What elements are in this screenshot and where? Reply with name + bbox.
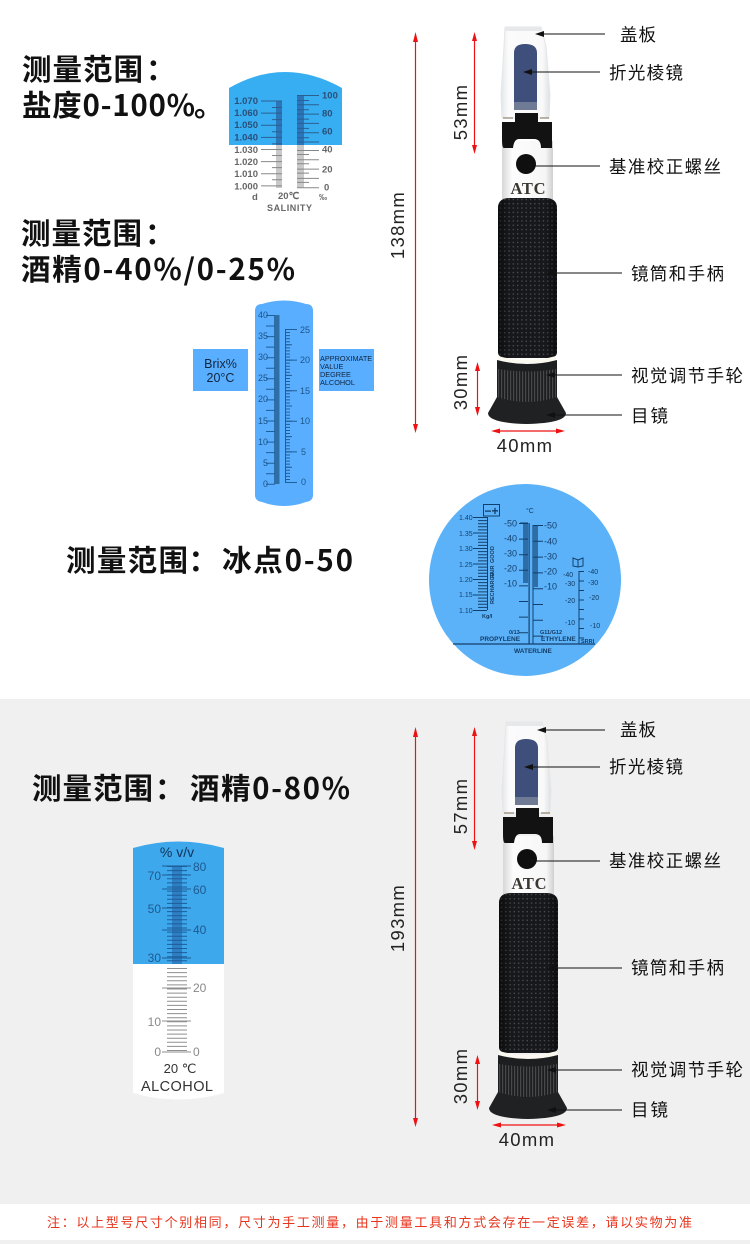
label box: approximate value degree alcohol (319, 349, 374, 391)
heading: alcohol 0-80 range: ： (155, 766, 185, 808)
salinity labels: 1.020 (234, 157, 258, 168)
alcohol right labels: 0 (301, 477, 306, 487)
washer fluid scale: -10 (565, 620, 575, 627)
callout: lower calibration screw (525, 848, 721, 873)
right scale labels: 60 (193, 883, 207, 897)
callout: calibration screw: 基准校正螺丝 (609, 154, 721, 179)
alcohol left labels: 30 (258, 352, 268, 362)
battery scale: Kg/l (482, 614, 493, 620)
salinity labels: 1.010 (234, 169, 258, 180)
washer fluid scale: -20 (565, 598, 575, 605)
eyepiece cup (488, 397, 566, 424)
callout: lower prism: 折光棱镜 (609, 754, 683, 779)
chart: salinity scale: 100 (322, 90, 338, 102)
chart: salinity scale: ‰ (319, 193, 327, 202)
washer fluid scale: SRRI (581, 639, 595, 645)
label box: approximate value degree alcohol: VALUE (320, 362, 344, 371)
coolant scale: G11/G12 (540, 630, 562, 636)
heading: freezing point range: 冰点0-50 (222, 538, 353, 580)
left scale labels: 50 (148, 902, 161, 916)
washer fluid scale: -30 (565, 581, 575, 588)
chart: salinity scale: d (252, 192, 258, 203)
dimension arrow: 193mm: 193mm (387, 884, 408, 952)
coolant scale: -50 (504, 518, 517, 528)
battery scale: 1.40 (459, 515, 473, 522)
salinity labels (234, 96, 258, 192)
left scale labels (148, 869, 161, 1059)
right scale labels: 40 (193, 923, 207, 937)
chart: salinity scale: 40 (322, 144, 333, 156)
heading: salinity range: ： (146, 47, 176, 89)
heading: alcohol 0-80 range: 酒精0-80% (190, 766, 350, 808)
chart: salinity scale: 60 (322, 126, 333, 138)
heading: salinity range (22, 47, 224, 125)
callout: lower calibration screw: 基准校正螺丝 (609, 848, 721, 873)
alcohol left labels: 40 (258, 310, 268, 320)
heading: freezing point range (66, 538, 353, 580)
alcohol right labels: 10 (300, 416, 310, 426)
alcohol left labels: 20 (258, 394, 268, 404)
heading: alcohol range (21, 211, 295, 289)
dimension arrow: 40mm (491, 428, 565, 456)
washer fluid scale: -20 (589, 595, 599, 602)
refractometer: upper instrument (488, 27, 566, 424)
dimension arrow: lower 30mm: 30mm (450, 1048, 471, 1104)
dimension arrow: lower 40mm: 40mm (499, 1129, 555, 1150)
heading: alcohol 0-80 range: 测量范围 (32, 766, 153, 808)
coolant scale (480, 507, 576, 655)
dimension arrow: lower 40mm (492, 1122, 566, 1150)
ATC mark: ATC (510, 179, 546, 198)
alcohol left labels: 5 (263, 458, 268, 468)
heading: freezing point range: 测量范围 (66, 538, 188, 580)
alcohol left labels: 10 (258, 437, 268, 447)
battery scale: GOOD (490, 546, 496, 563)
callout: focus wheel: 视觉调节手轮 (631, 363, 743, 388)
chart: salinity scale: 20℃ (278, 191, 300, 202)
salinity labels: 1.060 (234, 108, 258, 119)
alcohol left labels: 15 (258, 416, 268, 426)
label box: approximate value degree alcohol: ALCOHOL (320, 378, 355, 387)
battery scale: FAIR (490, 565, 496, 578)
battery scale: −+ (484, 504, 499, 518)
callout: eyepiece: 目镜 (631, 403, 668, 428)
dimension arrow: 193mm (387, 727, 418, 1127)
alcohol right labels: 20 (300, 355, 310, 365)
chart: alcohol 0-40 scale (255, 300, 313, 506)
dimension arrow: 53mm (450, 32, 477, 154)
heading: salinity range: 测量范围 (22, 47, 143, 89)
heading: alcohol range: 测量范围 (21, 211, 142, 253)
callout: focus wheel (546, 363, 743, 388)
chart: salinity scale: 80 (322, 108, 333, 120)
washer fluid scale: -40 (563, 572, 573, 579)
left scale labels: 10 (148, 1015, 161, 1029)
alcohol left labels: 0 (263, 479, 268, 489)
alcohol right labels: 15 (300, 386, 310, 396)
chart: alcohol 0-80 scale: 20 ℃ (164, 1061, 196, 1076)
coolant scale: -40 (504, 534, 517, 544)
coolant scale: ETHYLENE (541, 636, 576, 643)
battery scale: RECHARGE (490, 572, 496, 604)
label box: approximate value degree alcohol: DEGREE (320, 370, 351, 379)
chart: alcohol 0-80 scale (133, 842, 224, 1100)
salinity labels: 1.040 (234, 132, 258, 144)
label box: Brix: 20°C (207, 371, 234, 385)
chart: alcohol 0-80 scale: % v/v (160, 844, 194, 860)
dimension arrow: 57mm: 57mm (450, 778, 471, 834)
battery scale: 1.25 (459, 562, 473, 569)
dimension arrow: 57mm (450, 727, 477, 850)
white ring (498, 356, 556, 364)
alcohol right labels: 5 (301, 447, 306, 457)
silver body (502, 141, 553, 199)
dimension arrow: 30mm (450, 354, 480, 416)
coolant scale: °C (526, 507, 534, 515)
battery scale: 1.35 (459, 531, 473, 538)
callout: calibration screw (524, 154, 721, 179)
salinity labels: 1.050 (234, 120, 258, 131)
heading: freezing point range: ： (188, 538, 218, 580)
coolant scale: -50 (544, 520, 557, 530)
coolant scale: -40 (544, 536, 557, 546)
chart: salinity scale: 20 (322, 164, 333, 176)
coolant scale: PROPYLENE (480, 636, 521, 643)
callout: barrel and handle: 镜筒和手柄 (631, 261, 724, 286)
panel: lower section background (0, 699, 750, 1204)
heading: alcohol range: 酒精0-40%/0-25% (21, 247, 295, 289)
callout: lower cover plate: 盖板 (620, 717, 656, 742)
coolant scale: -20 (544, 566, 557, 576)
callout: lower barrel and handle: 镜筒和手柄 (631, 955, 724, 980)
callout: lower prism (524, 754, 683, 779)
heading: salinity range: 盐度0-100% (22, 83, 195, 125)
salinity labels: 1.030 (234, 145, 258, 156)
dimension arrow: 53mm: 53mm (450, 84, 471, 140)
bottom strip (0, 1240, 750, 1244)
refractometer: lower instrument (489, 722, 567, 1119)
chart: salinity scale: 0 (324, 182, 329, 194)
dimension arrow: 30mm: 30mm (450, 354, 471, 410)
callout: lower eyepiece: 目镜 (631, 1097, 668, 1122)
alcohol left labels: 25 (258, 373, 268, 383)
battery scale: 1.10 (459, 608, 473, 615)
left scale labels: 70 (148, 869, 161, 883)
label box: Brix: Brix% (204, 357, 237, 371)
washer fluid scale: -40 (588, 569, 598, 576)
chart: salinity scale (229, 72, 342, 213)
dimension arrow: 138mm (387, 32, 418, 433)
handle (498, 198, 557, 358)
salinity labels: 1.000 (234, 182, 258, 192)
battery scale (459, 504, 500, 620)
focus wheel (497, 360, 557, 403)
coolant scale: 0/13 (509, 630, 520, 636)
callout: prism (523, 60, 683, 85)
clear cover plate (501, 27, 550, 118)
chart: freezing point circular scale (429, 484, 621, 676)
left scale labels: 30 (148, 951, 161, 965)
calibration screw (516, 154, 536, 174)
chart: alcohol 0-80 scale: ALCOHOL (141, 1079, 213, 1095)
washer fluid scale: -10 (590, 623, 600, 630)
battery scale: 1.30 (459, 546, 473, 553)
left scale labels: 0 (154, 1045, 161, 1059)
dimension arrow: 40mm: 40mm (497, 435, 553, 456)
heading: alcohol 0-80 range (32, 766, 350, 808)
coolant scale: -10 (544, 582, 557, 592)
battery scale: 1.20 (459, 577, 473, 584)
label box: Brix (193, 349, 248, 391)
coolant scale: -10 (504, 578, 517, 588)
callout: lower focus wheel: 视觉调节手轮 (631, 1057, 743, 1082)
callout: lower cover plate (537, 717, 656, 742)
label box: approximate value degree alcohol: APPROXIMATE (320, 354, 372, 363)
callout: cover plate (535, 22, 656, 47)
coolant scale: -20 (504, 564, 517, 574)
right scale labels: 80 (193, 860, 207, 874)
coolant scale: -30 (504, 548, 517, 558)
right scale labels (193, 860, 207, 1059)
callout: prism: 折光棱镜 (609, 60, 683, 85)
heading: alcohol range: ： (145, 211, 175, 253)
callout: eyepiece (546, 403, 668, 428)
callout: barrel and handle (546, 261, 724, 286)
alcohol left labels (258, 310, 268, 489)
washer fluid scale (563, 558, 600, 645)
coolant scale: -30 (544, 552, 557, 562)
prism (514, 44, 537, 110)
alcohol right labels: 25 (300, 325, 310, 335)
dimension arrow: 138mm: 138mm (387, 191, 408, 259)
chart: salinity scale: SALINITY (267, 203, 312, 213)
hinge (502, 113, 552, 148)
battery scale: 1.15 (459, 592, 473, 599)
heading: salinity range: 。 (194, 83, 224, 125)
callout: cover plate: 盖板 (620, 22, 656, 47)
alcohol left labels: 35 (258, 331, 268, 341)
right scale labels: 20 (193, 981, 207, 995)
callout: lower focus wheel (547, 1057, 743, 1082)
right scale labels: 0 (193, 1045, 200, 1059)
alcohol right labels (300, 325, 310, 487)
coolant scale: WATERLINE (514, 648, 552, 655)
callout: lower barrel and handle (547, 955, 724, 980)
footnote: 注：以上型号尺寸个别相同，尺寸为手工测量，由于测量工具和方式会存在一定误差，请以实物为准 (47, 1212, 692, 1231)
dimension arrow: lower 30mm (450, 1048, 480, 1110)
washer fluid scale: -30 (588, 580, 598, 587)
salinity labels: 1.070 (234, 96, 258, 107)
callout: lower eyepiece (547, 1097, 668, 1122)
